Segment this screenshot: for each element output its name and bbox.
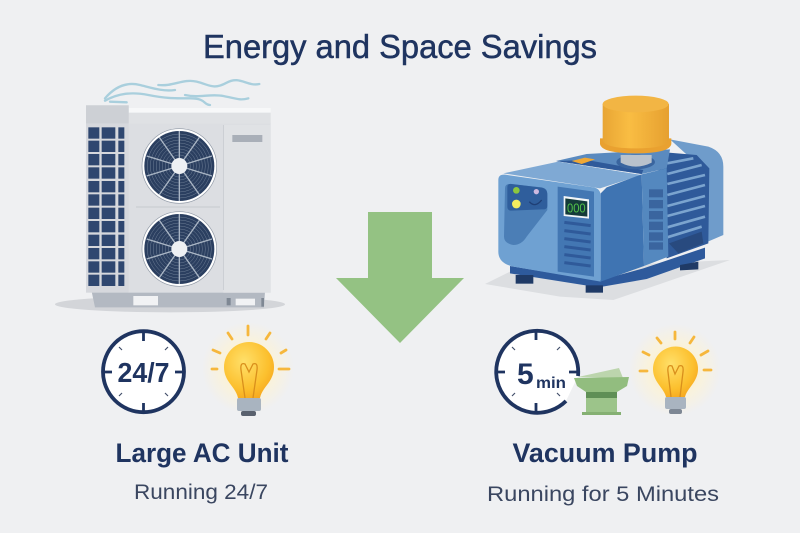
feet (516, 262, 698, 293)
arrow: energy reduction (336, 212, 464, 343)
motor end cap (670, 139, 723, 245)
top cover (128, 112, 271, 124)
base plate (510, 248, 705, 287)
label plate (232, 135, 262, 142)
icon: 24/7 clock: 24/7 (118, 357, 170, 388)
sublabel: running 24/7: Running 24/7 (134, 481, 268, 504)
main cabinet (128, 123, 271, 293)
ground shadow (55, 296, 285, 312)
sublabel: running for 5 minutes: Running for 5 Minutes (487, 483, 719, 506)
label: vacuum pump: Vacuum Pump (512, 438, 698, 468)
title: Energy and Space Savings (203, 28, 597, 65)
side column (86, 105, 129, 293)
vent band (642, 168, 668, 266)
right face (601, 174, 644, 282)
illustration: large AC unit (55, 80, 285, 312)
digital display (564, 196, 589, 219)
unit base (92, 292, 265, 307)
motor body (657, 152, 709, 258)
ground shadow (485, 260, 730, 300)
rear outlet (669, 232, 703, 253)
icon: 24/7 clock (103, 331, 184, 412)
icon: light bulb, left (202, 322, 294, 416)
illustration: vacuum pump: 000 (567, 201, 586, 216)
orange handle (572, 158, 595, 164)
vent slats (564, 222, 591, 266)
cooling fins (667, 158, 705, 237)
display column (558, 187, 594, 277)
illustration: vacuum pump (485, 96, 730, 300)
control panel (504, 184, 547, 245)
top rear surface (556, 149, 670, 174)
vent grille (88, 127, 124, 286)
icon: light bulb, right (629, 324, 721, 416)
icon: 5 min clock: min (536, 375, 566, 392)
icon: 5 min clock (495, 331, 578, 413)
top surface (503, 162, 642, 188)
heat waves (105, 80, 259, 105)
filter cap (603, 104, 669, 148)
icon: small green pump (574, 368, 629, 415)
fans (142, 129, 217, 286)
icon: 5 min clock: 5 (517, 358, 534, 391)
filter flange (600, 138, 671, 153)
filter neck (616, 155, 655, 169)
label: large AC unit: Large AC Unit (116, 438, 288, 468)
front face (498, 175, 601, 282)
